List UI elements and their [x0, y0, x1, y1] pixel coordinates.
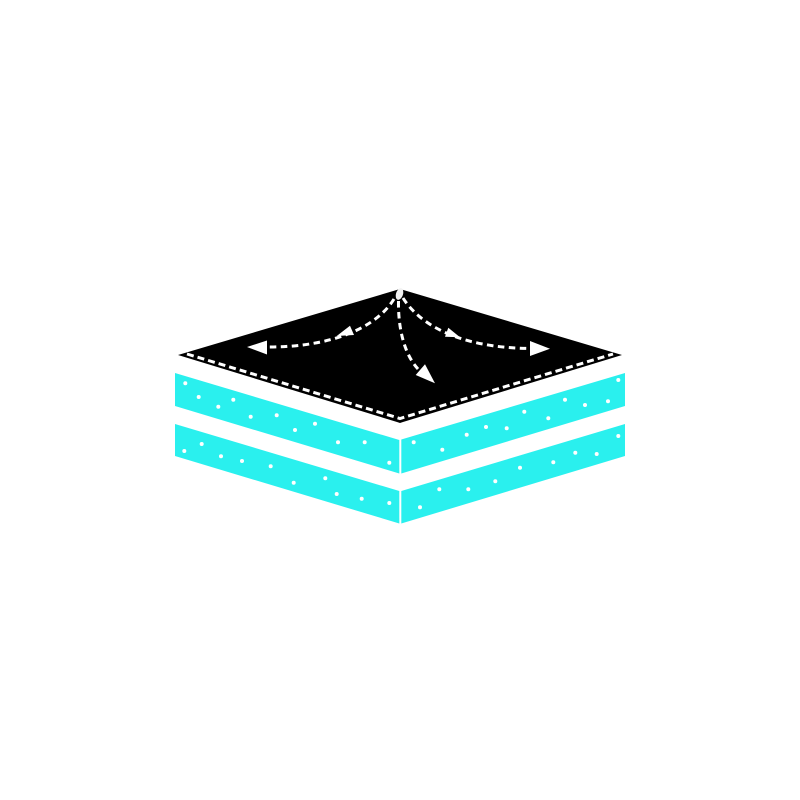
arrow: downward flow [398, 301, 435, 383]
arrow: left flow [247, 299, 394, 354]
top surface [178, 289, 622, 423]
upper layer [175, 373, 625, 474]
arrow: right flow [403, 298, 550, 356]
dashed perimeter [187, 354, 613, 418]
flow arrows [247, 287, 550, 383]
lower layer [175, 424, 625, 524]
arrow: origin point [394, 287, 405, 301]
